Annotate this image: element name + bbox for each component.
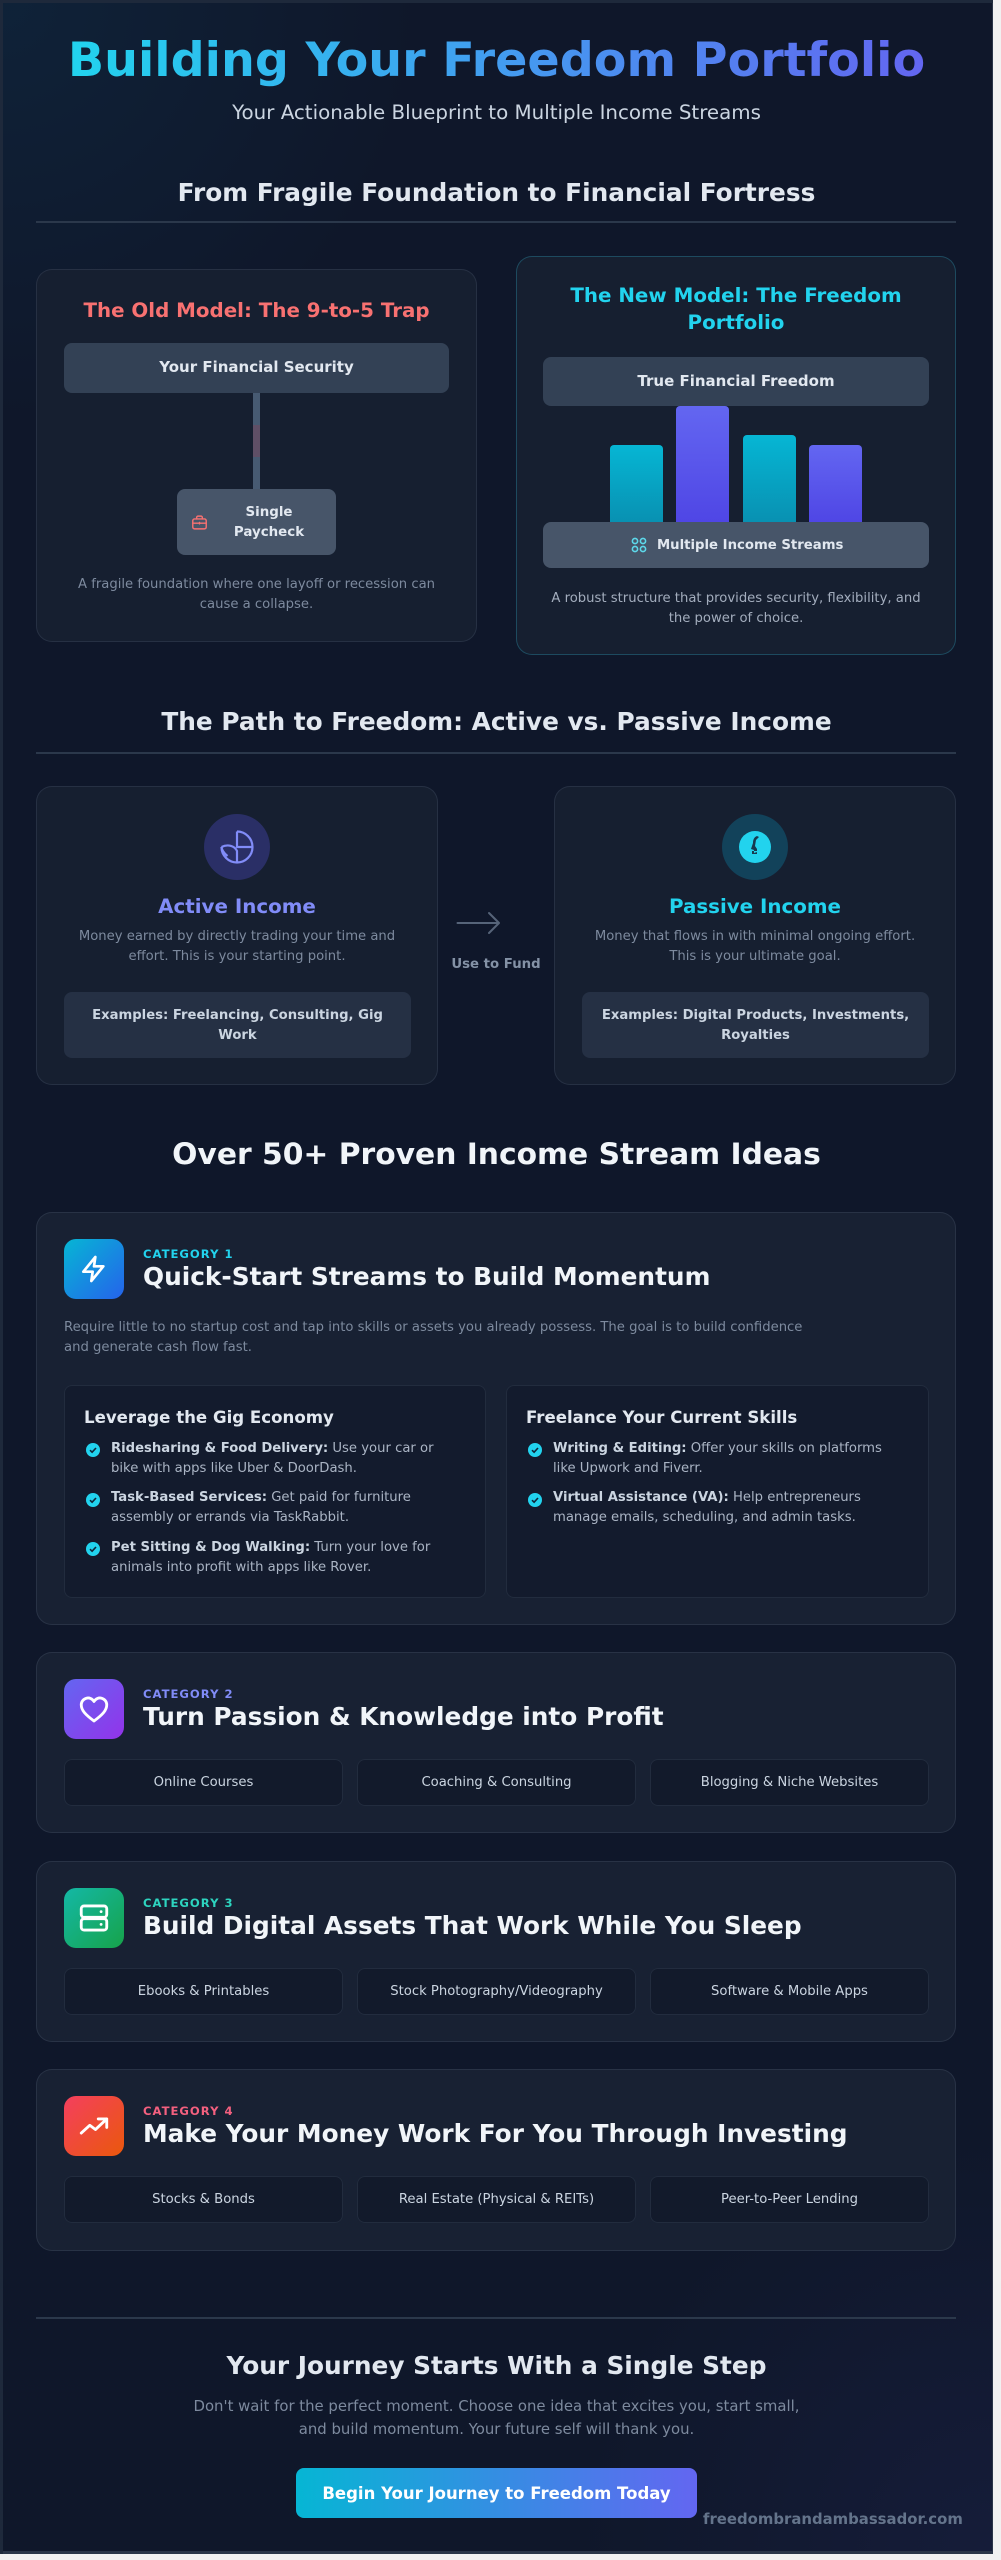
old model heading: The Old Model: The 9-to-5 Trap [83,298,430,322]
panel: new model [516,256,956,655]
active income description: effort. This is your starting point. [128,949,346,964]
category 1 description [64,1320,802,1355]
chip: Peer-to-Peer Lending [721,2192,858,2207]
category 2 label: CATEGORY 2 [143,1687,234,1701]
panel: active income [36,786,438,1085]
active income description: Money earned by directly trading your time and [79,929,395,944]
freelance heading: Freelance Your Current Skills [526,1408,797,1427]
pet sitting item: animals into profit with apps like Rover. [111,1560,371,1575]
true financial freedom bar: True Financial Freedom [637,372,835,390]
check icon [528,1443,542,1457]
chip: Online Courses [154,1775,253,1790]
task services item: Task-Based Services: Get paid for furniture [111,1490,411,1505]
chip: Stocks & Bonds [152,2192,255,2207]
call to action button [296,2468,697,2518]
new model caption: the power of choice. [669,611,803,626]
financial security bar: Your Financial Security [159,358,354,376]
new model caption: A robust structure that provides security, flexibility, and [551,591,921,606]
virtual assistance item: manage emails, scheduling, and admin tasks. [553,1510,856,1525]
multiple streams label: Multiple Income Streams [657,538,843,553]
old model caption: A fragile foundation where one layoff or recession can [78,577,435,592]
ridesharing item: bike with apps like Uber & DoorDash. [111,1461,357,1476]
panel: category 4 [36,2069,956,2251]
passive examples: Royalties [721,1028,790,1043]
active income description [79,929,395,964]
category 1 title: Quick-Start Streams to Build Momentum [143,1262,710,1291]
check icon [86,1542,100,1556]
watermark: freedombrandambassador.com [703,2510,963,2528]
call to action button: Begin Your Journey to Freedom Today [322,2484,671,2502]
subtitle: Your Actionable Blueprint to Multiple Income Streams [232,100,761,124]
passive income description [595,929,915,964]
single paycheck box [177,489,336,555]
category 4 label: CATEGORY 4 [143,2104,234,2118]
heading: income ideas: Over 50+ Proven Income Stream Ideas [172,1137,821,1172]
income stream bars [610,406,862,522]
sub-panel: freelance [506,1385,929,1598]
passive income heading: Passive Income [669,894,841,918]
passive income description: Money that flows in with minimal ongoing effort. [595,929,915,944]
check icon [528,1493,542,1507]
icon: lightning bolt [64,1239,124,1299]
chip [650,1759,929,1806]
panel: old model [36,269,477,642]
ridesharing item: Ridesharing & Food Delivery: Use your car or [111,1441,434,1456]
chip [357,1759,636,1806]
category 1 description: Require little to no startup cost and tap into skills or assets you already possess. The goal is to build confidence [64,1320,802,1335]
chip: Real Estate (Physical & REITs) [399,2192,594,2207]
financial security bar [64,343,449,393]
icon: trending up [64,2096,124,2156]
paycheck label: Single [245,505,293,520]
true financial freedom bar [543,357,929,406]
sub-panel: gig economy [64,1385,486,1598]
check icon [86,1443,100,1457]
active examples: Examples: Freelancing, Consulting, Gig [92,1008,383,1023]
closing paragraph: Don't wait for the perfect moment. Choose one idea that excites you, start small, [194,2397,800,2415]
gig economy heading: Leverage the Gig Economy [84,1408,334,1427]
new model heading: Portfolio [688,311,784,334]
closing paragraph: and build momentum. Your future self will thank you. [299,2420,694,2438]
active income heading: Active Income [158,894,316,918]
passive income description: This is your ultimate goal. [669,949,841,964]
panel: category 3 [36,1861,956,2042]
category 4 title: Make Your Money Work For You Through Investing [143,2119,847,2148]
icon: active income [204,814,270,880]
chip [64,1968,343,2015]
task services item: assembly or errands via TaskRabbit. [111,1510,349,1525]
chip: Software & Mobile Apps [711,1984,868,1999]
chip [650,2176,929,2223]
chip: Stock Photography/Videography [390,1984,603,1999]
category 3 label: CATEGORY 3 [143,1896,234,1910]
ridesharing item [111,1441,434,1476]
pet sitting item [111,1540,430,1575]
writing item: like Upwork and Fiverr. [553,1461,703,1476]
closing paragraph [194,2397,800,2438]
active examples [64,992,411,1058]
chip: Blogging & Niche Websites [701,1775,878,1790]
chip [650,1968,929,2015]
title: Building Your Freedom Portfolio [68,32,925,88]
virtual assistance item [553,1490,861,1525]
icon: passive income [722,814,788,880]
chip [64,2176,343,2223]
heading: path to freedom: The Path to Freedom: Active vs. Passive Income [161,706,832,736]
closing heading: Your Journey Starts With a Single Step [227,2351,766,2380]
writing item [553,1441,882,1476]
icon: heart [64,1679,124,1739]
check icon [86,1493,100,1507]
old model caption [78,577,435,612]
multiple income streams bar [543,522,929,568]
icon: briefcase [192,515,207,530]
category 2 title: Turn Passion & Knowledge into Profit [143,1702,664,1731]
icon: server [64,1888,124,1948]
virtual assistance item: Virtual Assistance (VA): Help entrepreneurs [553,1490,861,1505]
category 3 title: Build Digital Assets That Work While You Sleep [143,1911,802,1940]
chip [357,2176,636,2223]
single pillar connector [253,393,260,489]
heading: fragile to fortress: From Fragile Foundation to Financial Fortress [178,178,815,207]
chip [64,1759,343,1806]
category 1 description: and generate cash flow fast. [64,1340,252,1355]
paycheck label [234,505,304,540]
chip [357,1968,636,2015]
new model heading [570,284,902,334]
panel: category 2 [36,1652,956,1833]
chip: Ebooks & Printables [138,1984,269,1999]
paycheck label: Paycheck [234,525,304,540]
writing item: Writing & Editing: Offer your skills on platforms [553,1441,882,1456]
passive examples [582,992,929,1058]
new model heading: The New Model: The Freedom [570,284,902,307]
chip: Coaching & Consulting [421,1775,572,1790]
panel: category 1 [36,1212,956,1625]
task services item [111,1490,411,1525]
new model caption [551,591,921,626]
arrow: use to fund [456,912,500,934]
active examples: Work [218,1028,257,1043]
icon: grid circles [632,538,646,552]
panel: passive income [554,786,956,1085]
arrow label: Use to Fund [451,957,541,972]
pet sitting item: Pet Sitting & Dog Walking: Turn your love for [111,1540,430,1555]
category 1 label: CATEGORY 1 [143,1247,234,1261]
passive examples: Examples: Digital Products, Investments, [602,1008,909,1023]
old model caption: cause a collapse. [200,597,313,612]
